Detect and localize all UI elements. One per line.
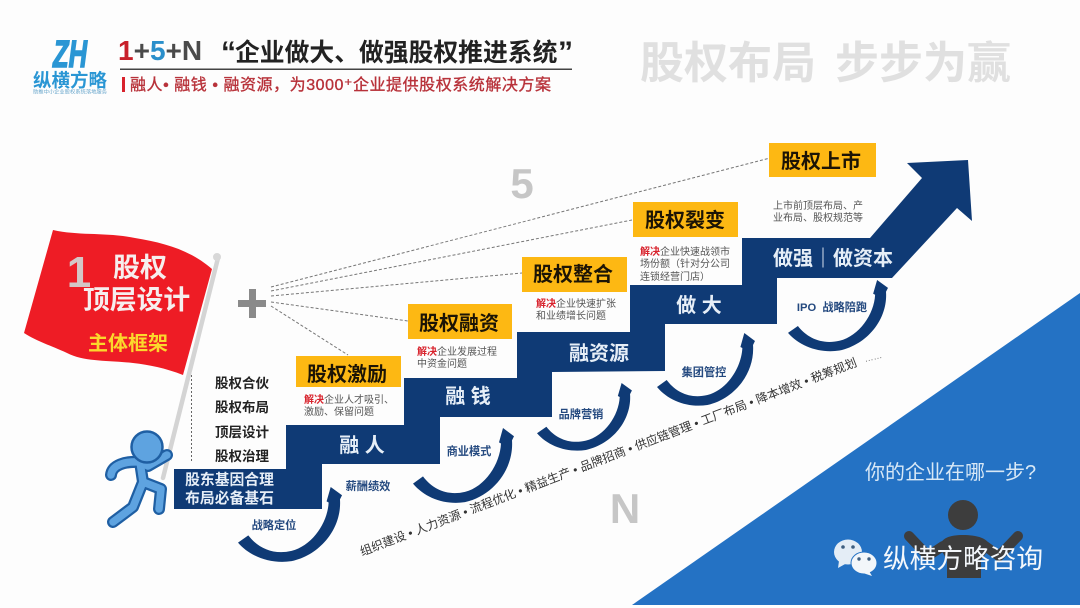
step labels: 布局必备基石: [185, 489, 274, 507]
title: ”: [558, 36, 573, 69]
step descriptions: 解决企业快速战领市: [640, 245, 730, 258]
step labels: 融 人: [339, 434, 385, 457]
icon: running person: [111, 432, 167, 522]
dashed connectors: [271, 158, 770, 355]
label: 薪酬绩效: 薪酬绩效: [346, 479, 390, 493]
watermark: 纵横方略咨询: [883, 544, 1043, 574]
list of top-level items: [215, 375, 269, 464]
flag: [24, 230, 212, 375]
yellow boxes: 股权上市: [781, 149, 861, 173]
step labels: [185, 247, 893, 507]
plus sign: [238, 289, 266, 318]
step descriptions: 中资金问题: [417, 357, 467, 370]
yellow boxes: 股权整合: [533, 263, 613, 286]
faded heading: 步步为赢: [835, 39, 1011, 88]
flag: 主体框架: [88, 331, 168, 355]
list of top-level items: 股权布局: [215, 399, 269, 415]
yellow boxes: 股权融资: [419, 312, 499, 335]
icon: WeChat: [834, 540, 877, 576]
letter N: N: [610, 485, 640, 532]
step descriptions: 业布局、股权规范等: [773, 211, 863, 224]
step descriptions: 解决企业发展过程: [417, 345, 497, 358]
subtitle: 融人• 融钱 • 融资源，为3000⁺企业提供股权系统解决方案: [130, 76, 551, 94]
ellipsis: ……: [863, 350, 883, 364]
title: 1+5+N: [118, 35, 202, 66]
header rule: [120, 68, 572, 70]
curved arrow: 商业模式: [413, 428, 514, 503]
logo: [33, 34, 108, 96]
curved arrow: 集团管控: 集团管控: [682, 365, 726, 379]
yellow boxes: 股权裂变: [645, 208, 725, 232]
dotted guide: [190, 375, 192, 463]
icon: shrugging person: [909, 500, 1018, 578]
faded heading: 股权布局: [640, 39, 816, 88]
staircase arrow: [174, 160, 972, 509]
number 5: 5: [510, 160, 534, 207]
title: “: [221, 36, 236, 69]
flag: 股权: [113, 253, 167, 283]
step labels: 做强｜做资本: [773, 247, 893, 270]
curved arrow: 品牌营销: 品牌营销: [559, 407, 603, 421]
logo: 助推中小企业股权系统落地服务: [33, 88, 107, 96]
step descriptions: 场份额（针对分公司: [640, 257, 730, 270]
list of top-level items: 股权合伙: [215, 375, 269, 391]
curved arrow: 品牌营销: [537, 383, 632, 451]
blue corner panel: [632, 293, 1080, 605]
step descriptions: 上市前顶层布局、产: [773, 199, 863, 212]
faded heading: [640, 39, 1011, 88]
step labels: 融 钱: [445, 385, 491, 408]
logo: 纵横方略: [33, 70, 108, 91]
diagonal list of N items: 组织建设 • 人力资源 • 流程优化 • 精益生产 • 品牌招商 • 供应链管理 • 工厂布局 • 降本增效 • 税筹规划: [358, 355, 859, 559]
pole: [163, 253, 221, 478]
yellow boxes: 股权激励: [307, 363, 387, 386]
question: 你的企业在哪一步?: [865, 461, 1036, 484]
list of top-level items: 股权治理: [215, 448, 269, 464]
yellow boxes: [296, 143, 876, 387]
step descriptions: 激励、保留问题: [304, 405, 374, 418]
step descriptions: 解决企业人才吸引、: [304, 393, 394, 406]
flag: 1: [67, 248, 91, 297]
step descriptions: 连锁经营门店）: [640, 270, 710, 283]
flag: 顶层设计: [83, 285, 190, 315]
step labels: 股东基因合理: [185, 470, 274, 488]
logo: ZH: [52, 34, 88, 76]
title: [118, 35, 573, 69]
curved arrow: 战略定位: [238, 487, 342, 562]
step descriptions: [304, 199, 863, 418]
list of top-level items: 顶层设计: [215, 425, 269, 440]
curved arrow: 集团管控: [657, 333, 755, 406]
curved arrow: IPO 战略陪跑: [788, 280, 888, 351]
curved arrow: 商业模式: 商业模式: [447, 444, 491, 458]
title: 企业做大、做强股权推进系统: [235, 39, 558, 67]
step descriptions: 和业绩增长问题: [536, 309, 606, 322]
curved arrow: 战略定位: 战略定位: [252, 518, 296, 532]
curved arrow: IPO 战略陪跑: IPO 战略陪跑: [797, 300, 867, 314]
step labels: 做 大: [676, 294, 722, 317]
step labels: 融资源: [569, 342, 629, 365]
step descriptions: 解决企业快速扩张: [536, 297, 616, 310]
